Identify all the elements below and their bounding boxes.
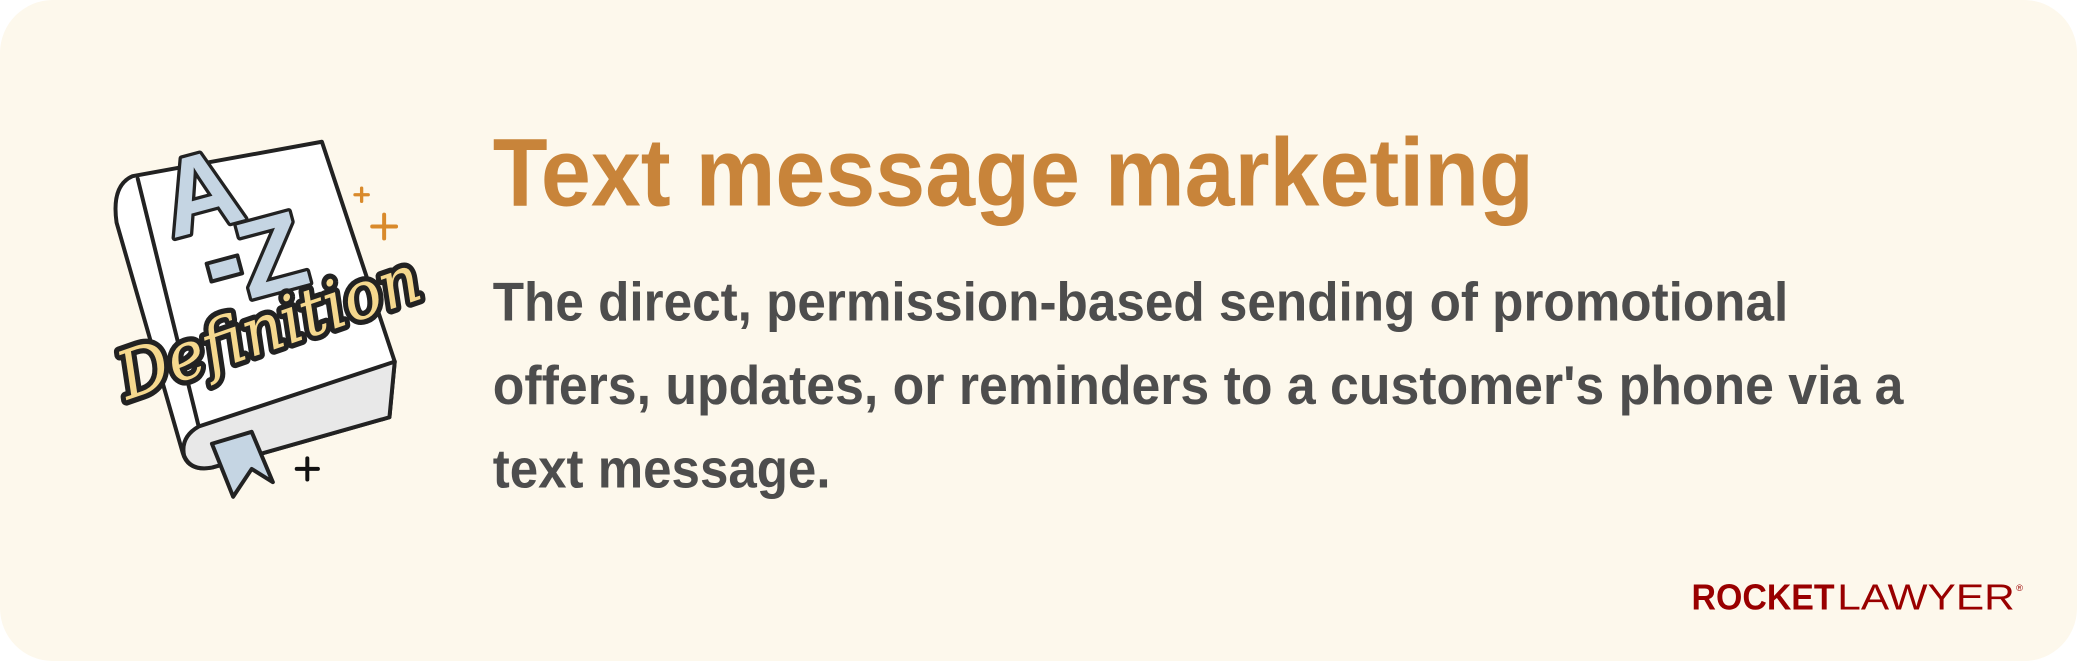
- logo: Rocket Lawyer: ROCKET: [1692, 577, 1835, 617]
- icon: definition book: [106, 124, 430, 497]
- logo: Rocket Lawyer: ®: [2016, 583, 2023, 593]
- logo: Rocket Lawyer: [1692, 577, 2023, 617]
- icon: definition book: Definition: [106, 240, 430, 415]
- title: Text message marketing: [493, 118, 1534, 226]
- definition text: [493, 272, 1904, 499]
- definition text: text message.: [493, 438, 831, 499]
- definition text: offers, updates, or reminders to a customer's phone via a: [493, 355, 1904, 416]
- icon: definition book: Z: [224, 189, 319, 323]
- definition text: The direct, permission-based sending of promotional: [493, 272, 1788, 333]
- icon: sparkle plus signs: [297, 188, 396, 480]
- icon: definition book: A: [147, 124, 254, 262]
- logo: Rocket Lawyer: LAWYER: [1837, 577, 2015, 617]
